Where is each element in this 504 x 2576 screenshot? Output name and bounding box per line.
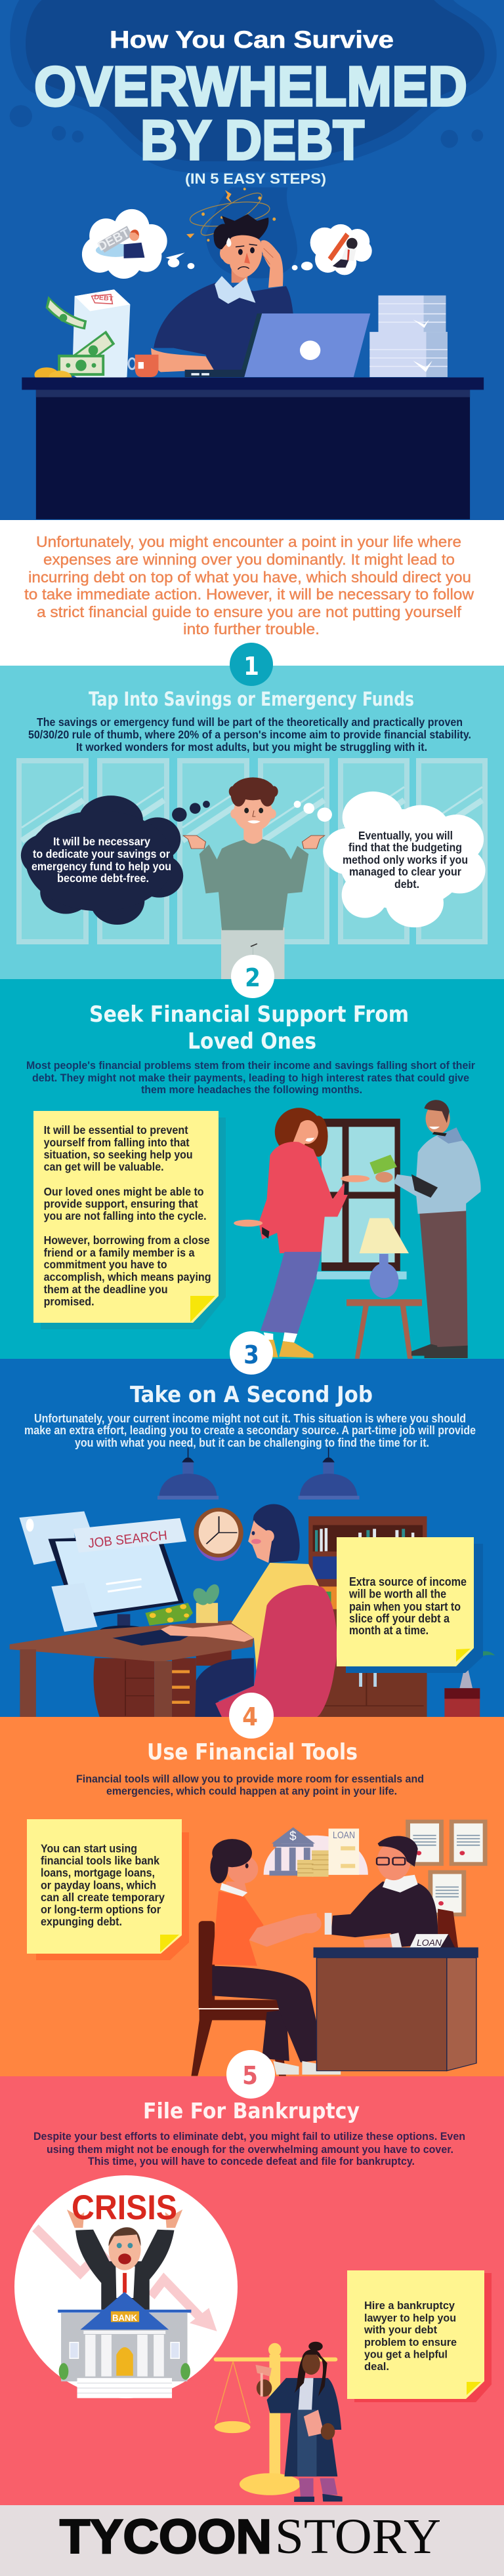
callout: sticky note: can all create temporary xyxy=(41,1891,165,1904)
body: step 2: them more headaches the following months. xyxy=(141,1083,362,1096)
callout: sticky note: or long-term options for xyxy=(41,1903,161,1916)
illustration: friends exchanging money xyxy=(234,1100,481,1359)
icon: left thought cloud xyxy=(82,209,194,279)
heading: step 5: File For Bankruptcy xyxy=(143,2098,360,2123)
callout: white thought cloud: Eventually, you will xyxy=(358,829,453,842)
illustration: lawyer and scales xyxy=(214,2342,343,2502)
heading: step 2 xyxy=(89,1001,409,1055)
panel: step 1 xyxy=(0,643,504,980)
callout: sticky note: Hire a bankruptcy xyxy=(364,2300,455,2312)
heading: step 2: Seek Financial Support From xyxy=(89,1001,409,1028)
body: step 1: The savings or emergency fund will be part of the theoretically and practically proven xyxy=(37,715,463,729)
callout: sticky note: problem to ensure xyxy=(364,2337,457,2348)
intro text: expenses are winning over you dominantly. It might lead to xyxy=(43,551,455,568)
body: step 2 xyxy=(26,1059,475,1096)
customer and chair xyxy=(191,1839,341,2076)
woman xyxy=(161,1504,337,1717)
callout: sticky note: provide support, ensuring that xyxy=(44,1197,198,1211)
panel: hero xyxy=(0,0,504,520)
callout: sticky note: can get will be valuable. xyxy=(44,1160,164,1173)
callout: sticky note: lawyer to help you xyxy=(364,2312,456,2324)
icon: bank and loan xyxy=(264,1827,368,1877)
plant right xyxy=(444,1651,495,1717)
body: step 3: you with what you need, but it can be challenging to find the time for it. xyxy=(75,1436,429,1449)
illustration: crisis bank circle xyxy=(14,2175,238,2398)
callout: white thought cloud: managed to clear your xyxy=(349,865,461,878)
callout: sticky note: It will be essential to prevent xyxy=(44,1123,188,1137)
callout: sticky note: you are not falling into the cycle. xyxy=(44,1209,207,1222)
callout: dark thought cloud: to dedicate your savings or xyxy=(33,847,170,860)
illustration: loan handshake xyxy=(191,1822,485,2076)
badge: step 3 xyxy=(230,1331,273,1375)
body: step 1: 50/30/20 rule of thumb, where 20% of a person's income aim to provide financial stability. xyxy=(28,728,471,741)
callout: dark thought cloud: emergency fund to help you xyxy=(32,860,171,873)
body: step 4 xyxy=(76,1773,424,1797)
label: bank dollar sign: $ xyxy=(289,1830,297,1843)
callout: white thought cloud: debt. xyxy=(394,877,419,891)
panel: step 4 xyxy=(0,1693,504,2076)
subtitle: (IN 5 EASY STEPS) xyxy=(185,171,326,187)
body: step 2: debt. They might not make their payments, leading to high interest rates that could give xyxy=(32,1072,469,1084)
callout: sticky note: financial tools like bank xyxy=(41,1854,159,1867)
callout: sticky note: friend or a family member is a xyxy=(44,1246,195,1259)
icon: wall clock xyxy=(194,1508,243,1561)
intro text: incurring debt on top of what you have, which should direct you xyxy=(28,569,471,586)
logo: TYCOON: TYCOON xyxy=(60,2510,272,2564)
body: step 2: Most people's financial problems stem from their income and savings falling short of their xyxy=(26,1059,475,1072)
label: job search sign: JOB SEARCH xyxy=(87,1528,168,1551)
illustration: woman job searching xyxy=(10,1447,495,1717)
icon: right thought cloud xyxy=(292,224,372,275)
body: step 3 xyxy=(24,1412,476,1449)
callout: sticky note: accomplish, which means paying xyxy=(44,1270,211,1283)
illustration: hero background blobs xyxy=(10,0,497,278)
callout: sticky note: promised. xyxy=(44,1295,94,1308)
bank building xyxy=(58,2292,191,2398)
body: step 4: Financial tools will allow you to provide more room for essentials and xyxy=(76,1773,424,1785)
paper pile with bills xyxy=(72,289,130,384)
intro text: Unfortunately, you might encounter a point in your life where xyxy=(36,533,461,550)
badge: step 4: 4 xyxy=(242,1702,258,1731)
callout: sticky note xyxy=(27,1819,189,1960)
illustration: window panels xyxy=(19,761,485,942)
callout: sticky note: yourself from falling into that xyxy=(44,1136,190,1149)
label: debt block: DEBT xyxy=(95,226,133,254)
intro text: to take immediate action. However, it will be necessary to follow xyxy=(24,586,474,603)
panel: introduction xyxy=(0,520,504,666)
desk xyxy=(36,388,470,519)
badge: step 1: 1 xyxy=(243,652,259,681)
badge: step 3: 3 xyxy=(243,1340,259,1369)
illustration: pointing man xyxy=(172,777,332,980)
callout: sticky note: situation, so seeking help you xyxy=(44,1148,193,1161)
callout: sticky note: slice off your debt a xyxy=(349,1612,450,1625)
badge: step 2 xyxy=(231,955,274,998)
callout: sticky note: month at a time. xyxy=(349,1624,429,1637)
callout: white thought cloud xyxy=(323,792,486,927)
panicked man xyxy=(67,2209,182,2310)
label: BANK plate: BANK xyxy=(112,2312,137,2323)
man: sweater and arms xyxy=(154,283,293,371)
callout: sticky note: However, borrowing from a close xyxy=(44,1234,210,1247)
heading: step 3: Take on A Second Job xyxy=(130,1382,373,1408)
callout: dark thought cloud: It will be necessary xyxy=(53,835,150,848)
callout: sticky note: will be worth all the xyxy=(348,1587,446,1600)
desk xyxy=(10,1583,254,1717)
icon: ceiling lamps xyxy=(158,1447,360,1500)
title: BY DEBT: BY DEBT xyxy=(140,110,364,172)
callout: sticky note: them at the deadline you xyxy=(44,1283,168,1296)
bookshelf xyxy=(308,1516,427,1717)
label: debt stamp: DEBT xyxy=(94,294,114,303)
intro text: into further trouble. xyxy=(183,620,320,637)
body: step 5: using them might not be enough for the overwhelming amount you have to cover. xyxy=(47,2143,453,2156)
illustration: worried man at desk xyxy=(22,187,484,519)
intro text: a strict financial guide to ensure you are not putting yourself xyxy=(37,603,462,620)
badge: step 5: 5 xyxy=(242,2061,258,2090)
falling arrow xyxy=(35,2228,217,2331)
badge: step 5 xyxy=(226,2050,275,2099)
callout: sticky note xyxy=(337,1537,483,1673)
logo: STORY: STORY xyxy=(275,2509,441,2564)
callout: sticky note: with your debt xyxy=(364,2324,437,2336)
badge: step 4 xyxy=(229,1693,274,1739)
label: loan paper: LOAN xyxy=(333,1830,355,1841)
mug xyxy=(129,358,136,369)
body: step 5: This time, you will have to concede defeat and file for bankruptcy. xyxy=(88,2155,415,2167)
intro text xyxy=(24,533,474,637)
label: desk loan sign: LOAN xyxy=(417,1937,442,1948)
callout: sticky note: deal. xyxy=(364,2361,389,2373)
right paper stacks xyxy=(378,296,446,332)
callout: sticky note: loans, mortgage loans, xyxy=(41,1866,155,1880)
callout: sticky note: you get a helpful xyxy=(364,2349,448,2361)
title: OVERWHELMED: OVERWHELMED xyxy=(34,56,467,118)
heading: step 2: Loved Ones xyxy=(188,1028,316,1055)
callout: white thought cloud: find that the budgeting xyxy=(348,841,462,854)
panel: step 5 xyxy=(0,2050,504,2505)
certificates xyxy=(408,1822,485,1914)
computer and papers xyxy=(19,1511,186,1636)
body: step 5: Despite your best efforts to eliminate debt, you might fail to utilize these options. Even xyxy=(33,2130,465,2143)
callout: sticky note: expunging debt. xyxy=(41,1915,122,1928)
callout: dark thought cloud xyxy=(21,795,183,925)
callout: sticky note: Our loved ones might be able to xyxy=(44,1185,204,1198)
icon: dizzy orbits xyxy=(188,187,271,241)
heading: step 4: Use Financial Tools xyxy=(147,1739,358,1765)
callout: sticky note: You can start using xyxy=(41,1841,137,1855)
callout: sticky note xyxy=(347,2270,492,2402)
desk xyxy=(314,1947,478,2071)
body: step 1: It worked wonders for most adults, but you might be struggling with it. xyxy=(76,740,427,754)
badge: step 1 xyxy=(230,643,273,686)
man xyxy=(369,1100,481,1358)
callout: sticky note xyxy=(33,1111,226,1329)
laptop xyxy=(240,313,262,377)
callout: sticky note: commitment you have to xyxy=(44,1258,167,1271)
footer: brand xyxy=(0,2505,504,2576)
callout: dark thought cloud: become debt-free. xyxy=(57,872,149,885)
label: CRISIS: CRISIS xyxy=(72,2188,177,2227)
body: step 4: emergencies, which could happen at any point in your life. xyxy=(106,1785,397,1797)
callout: sticky note: Extra source of income xyxy=(349,1575,467,1588)
woman xyxy=(234,1108,369,1358)
heading: step 1: Tap Into Savings or Emergency Funds xyxy=(89,688,414,710)
title line: How You Can Survive: How You Can Survive xyxy=(110,26,394,53)
callout: sticky note: pain when you start to xyxy=(349,1600,461,1613)
callout: white thought cloud: method only works if you xyxy=(343,853,468,866)
badge: step 2: 2 xyxy=(245,963,261,992)
banker xyxy=(297,1836,458,1947)
panel: step 3 xyxy=(0,1331,504,1717)
callout: sticky note: or payday loans, which xyxy=(41,1878,156,1891)
body: step 5 xyxy=(33,2130,465,2167)
panel: step 2 xyxy=(0,955,504,1359)
body: step 1 xyxy=(28,715,471,754)
